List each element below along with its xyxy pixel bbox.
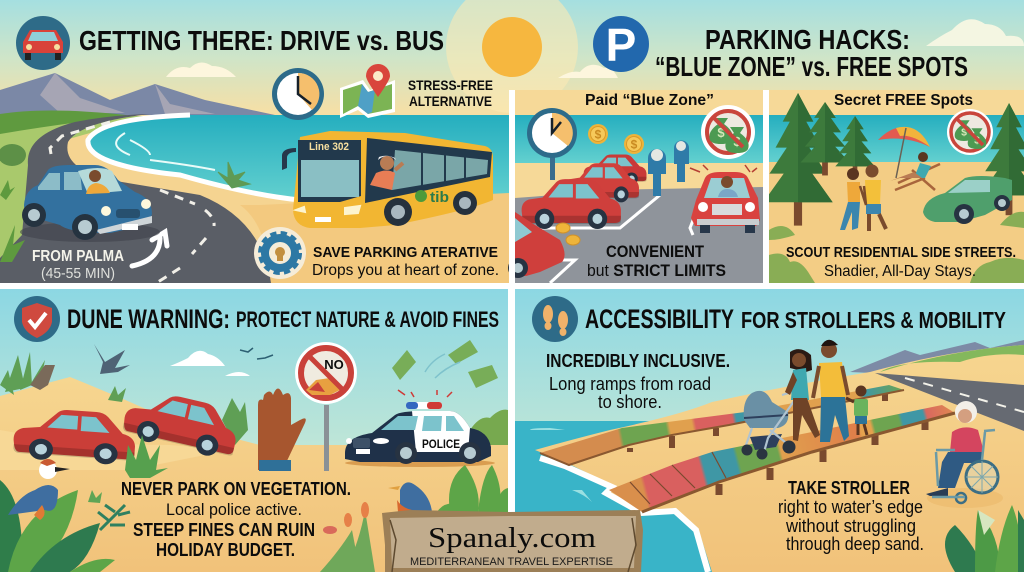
couple walking	[840, 164, 886, 231]
panel: parking hacks	[508, 16, 1024, 283]
icon: car badge	[16, 16, 70, 70]
woodpecker bird	[8, 459, 70, 520]
text: take stroller: right to water’s edge	[778, 497, 923, 517]
plaque: spanaly: Spanaly.com	[428, 523, 596, 554]
bird: perched	[30, 365, 55, 390]
text: never park: Local police active.	[166, 500, 302, 519]
trees	[763, 93, 1024, 226]
plant: top left grass	[0, 352, 45, 395]
bird: flying	[94, 344, 130, 374]
parked cars	[522, 154, 646, 229]
text: take stroller: through deep sand.	[786, 534, 924, 554]
icon: no money	[701, 105, 755, 159]
icon: parking P	[593, 16, 649, 72]
panel: getting there	[0, 0, 1024, 283]
text: scout streets	[786, 244, 1016, 280]
heading: secret free spots: Secret FREE Spots	[834, 92, 973, 109]
text: scout streets: Shadier, All-Day Stays.	[824, 263, 976, 280]
arrow: road curve	[132, 232, 167, 266]
birds: distant	[240, 348, 273, 359]
icon: sun	[446, 0, 578, 113]
title: parking hacks	[655, 24, 968, 82]
bird right	[388, 482, 432, 512]
surf	[540, 458, 708, 572]
text: take stroller: without struggling	[785, 516, 916, 536]
text: stress-free alternative: ALTERNATIVE	[409, 93, 492, 109]
parking meters	[648, 140, 689, 196]
sign: no dunes	[295, 342, 357, 471]
title: dune warning	[67, 304, 499, 334]
sign: no dunes: NO	[324, 357, 344, 372]
heading: paid blue zone: Paid “Blue Zone”	[585, 92, 714, 109]
cars on dune	[12, 386, 243, 466]
boardwalk: front	[609, 405, 955, 512]
text: from palma	[32, 248, 124, 282]
cloud	[926, 19, 1024, 46]
text: stress-free alternative	[408, 77, 493, 109]
sea	[88, 115, 510, 200]
hand stop	[258, 388, 306, 471]
text: convenient: but STRICT LIMITS	[587, 261, 726, 280]
police car	[345, 390, 495, 467]
text: convenient	[587, 242, 726, 280]
car: blue driver car	[20, 165, 160, 242]
asphalt lot	[515, 187, 763, 283]
text: inclusive	[546, 351, 730, 412]
bus: line 302: Line 302	[309, 141, 349, 153]
flowers	[320, 502, 375, 572]
title: accessibility	[585, 304, 1006, 334]
icon: footprints	[532, 296, 578, 342]
text: save parking: Drops you at heart of zone.	[312, 262, 499, 279]
police car: POLICE	[422, 439, 460, 451]
sand	[535, 345, 1024, 572]
cloud	[166, 62, 236, 77]
text: never park: HOLIDAY BUDGET.	[156, 540, 295, 560]
cloud	[558, 65, 618, 78]
leaves right	[437, 465, 508, 512]
icon: gear	[254, 227, 306, 279]
bushes	[769, 212, 1024, 283]
foreground leaves	[0, 480, 130, 572]
text: save parking	[312, 244, 499, 279]
title: getting there: GETTING THERE: DRIVE vs. BUS	[79, 25, 444, 56]
icon: clock	[272, 68, 324, 120]
text: never park: STEEP FINES CAN RUIN	[133, 520, 315, 540]
text: inclusive: INCREDIBLY INCLUSIVE.	[546, 351, 730, 371]
umbrella and lounger	[878, 127, 940, 190]
sea	[515, 421, 1024, 572]
plant: beach grass	[218, 162, 250, 188]
text: convenient: CONVENIENT	[606, 242, 705, 261]
boardwalk: back	[540, 385, 904, 465]
road	[875, 373, 1024, 431]
cloud	[225, 372, 250, 376]
road	[0, 114, 271, 283]
plants: roadside	[0, 144, 26, 262]
car: green	[923, 176, 1012, 224]
panel: dune warning	[0, 289, 508, 572]
title: parking hacks: PARKING HACKS:	[705, 24, 910, 55]
text: take stroller: TAKE STROLLER	[788, 478, 910, 498]
icon: no money small	[947, 109, 993, 155]
money flying	[392, 340, 498, 388]
icon: map pin	[340, 64, 395, 118]
family	[785, 340, 868, 442]
text: from palma: FROM PALMA	[32, 248, 124, 265]
title: dune warning: PROTECT NATURE & AVOID FINES	[236, 307, 499, 332]
plaque: spanaly: MEDITERRANEAN TRAVEL EXPERTISE	[410, 556, 613, 568]
icon: parking P: P	[606, 19, 636, 71]
text: from palma: (45-55 MIN)	[41, 265, 115, 282]
icons: coins	[588, 124, 644, 154]
mountains	[850, 340, 1024, 380]
icon: shield badge	[14, 296, 60, 342]
car: bottom-left red	[508, 212, 565, 278]
small plant	[88, 490, 102, 503]
panel: accessibility	[515, 289, 1024, 572]
plant: front grass	[125, 435, 168, 478]
text: inclusive: to shore.	[598, 392, 662, 412]
title: dune warning: DUNE WARNING:	[67, 304, 230, 334]
wheelchair user	[926, 401, 1003, 508]
text: save parking: SAVE PARKING ATERATIVE	[313, 244, 498, 261]
icon: coin stacks	[556, 223, 580, 245]
text: stress-free alternative: STRESS-FREE	[408, 77, 493, 93]
bus: line 302	[282, 131, 493, 228]
cloud	[170, 351, 225, 366]
mountains	[0, 73, 275, 115]
dunes	[0, 377, 508, 572]
text: take stroller	[778, 478, 924, 554]
bus: line 302: tib	[430, 189, 449, 206]
icon: clock on post	[527, 108, 577, 180]
plaque: spanaly	[382, 510, 643, 572]
plant: bottom right	[945, 505, 1024, 572]
text: never park: NEVER PARK ON VEGETATION.	[121, 479, 351, 499]
car: frustrated driver	[690, 165, 760, 233]
text: inclusive: Long ramps from road	[549, 374, 711, 394]
text: never park	[121, 479, 351, 560]
stroller	[742, 391, 799, 460]
bush right	[470, 410, 508, 445]
plant: dune grass	[108, 386, 248, 445]
title: accessibility: ACCESSIBILITY	[585, 304, 734, 334]
